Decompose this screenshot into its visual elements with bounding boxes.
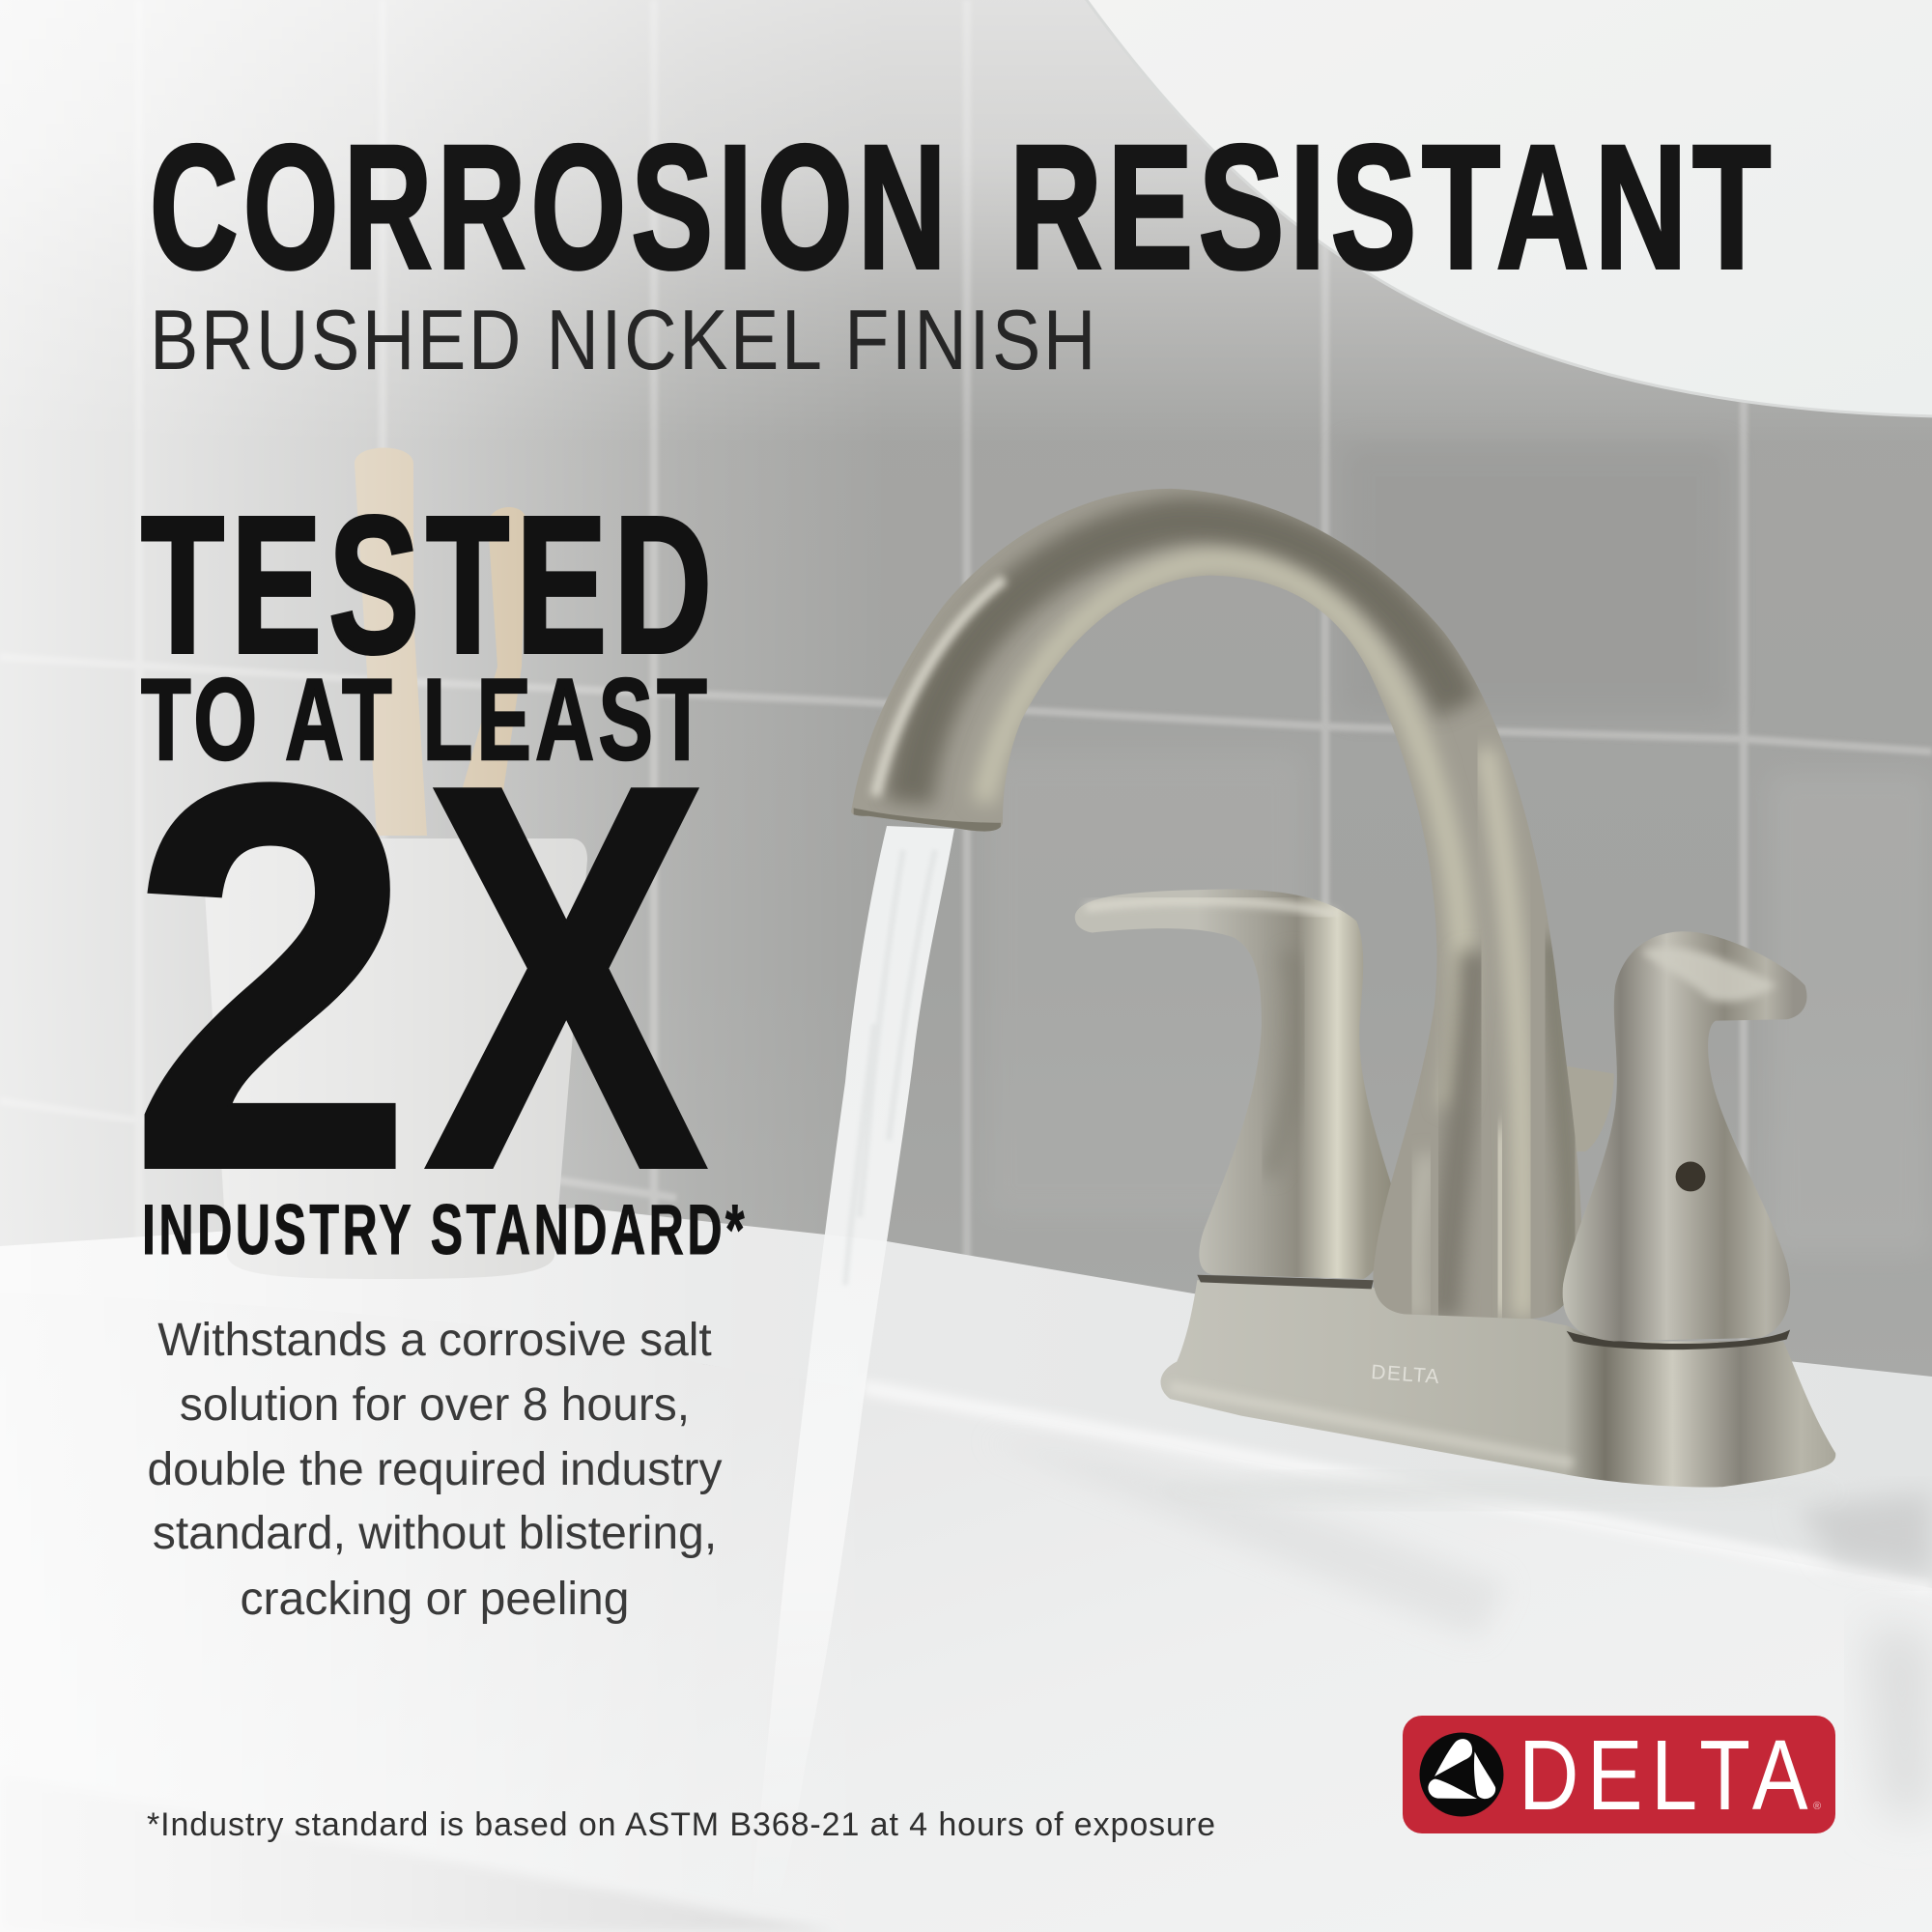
Delta logo [1403, 1716, 1835, 1833]
body text [147, 1315, 723, 1625]
body text: Withstands a corrosive salt [157, 1315, 712, 1366]
body text: double the required industry [147, 1444, 723, 1495]
big stat: 2X: 2 [128, 671, 414, 1284]
faucet shadow on counter [1160, 1475, 1837, 1505]
tile soft shading [985, 444, 1932, 1256]
wall tile grout lines [0, 0, 1932, 1391]
handle collar shadow [1567, 1330, 1790, 1350]
body text: cracking or peeling [241, 1574, 629, 1625]
right handle lever highlight [1641, 948, 1776, 1002]
subtitle: BRUSHED NICKEL FINISH [150, 292, 1098, 387]
sink shadow [985, 1439, 1507, 1637]
mirror [1084, 0, 1932, 416]
faucet [851, 489, 1835, 1507]
left handle top sheen [1086, 900, 1336, 914]
left handle neck shade [1268, 952, 1298, 1176]
big stat: 2X: X [423, 671, 711, 1284]
rim highlight [863, 1387, 1932, 1588]
footnote: *Industry standard is based on ASTM B368-21 at 4 hours of exposure [147, 1806, 1215, 1843]
left collar shadow [1197, 1275, 1374, 1289]
base front shine [1170, 1386, 1574, 1463]
water stream [749, 826, 954, 1922]
lower basin curve [0, 1774, 838, 1932]
main spout [851, 489, 1581, 1319]
base logo text: DELTA [1371, 1361, 1441, 1388]
water streaks [845, 850, 935, 1285]
set screw [1676, 1162, 1705, 1191]
logo mark [1420, 1733, 1503, 1816]
big stat: 2X [128, 671, 711, 1284]
left handle [1075, 890, 1394, 1279]
registered mark: ® [1813, 1801, 1821, 1812]
headline: tested: TESTED [141, 475, 719, 694]
title: CORROSION [150, 108, 952, 305]
headline: to at least: TO AT LEAST [141, 655, 711, 784]
pop-up lift rod [1561, 1065, 1614, 1151]
base plate [1160, 1280, 1835, 1487]
body text: solution for over 8 hours, [180, 1379, 690, 1431]
body text: standard, without blistering, [153, 1508, 717, 1559]
logo wordmark: DELTA [1519, 1719, 1816, 1831]
headline: industry standard: INDUSTRY STANDARD* [142, 1191, 748, 1269]
sink bowl [0, 1293, 1932, 1932]
toothbrushes and cup [203, 448, 587, 1279]
counter ledge [0, 1208, 1932, 1594]
right handle [1563, 931, 1806, 1341]
